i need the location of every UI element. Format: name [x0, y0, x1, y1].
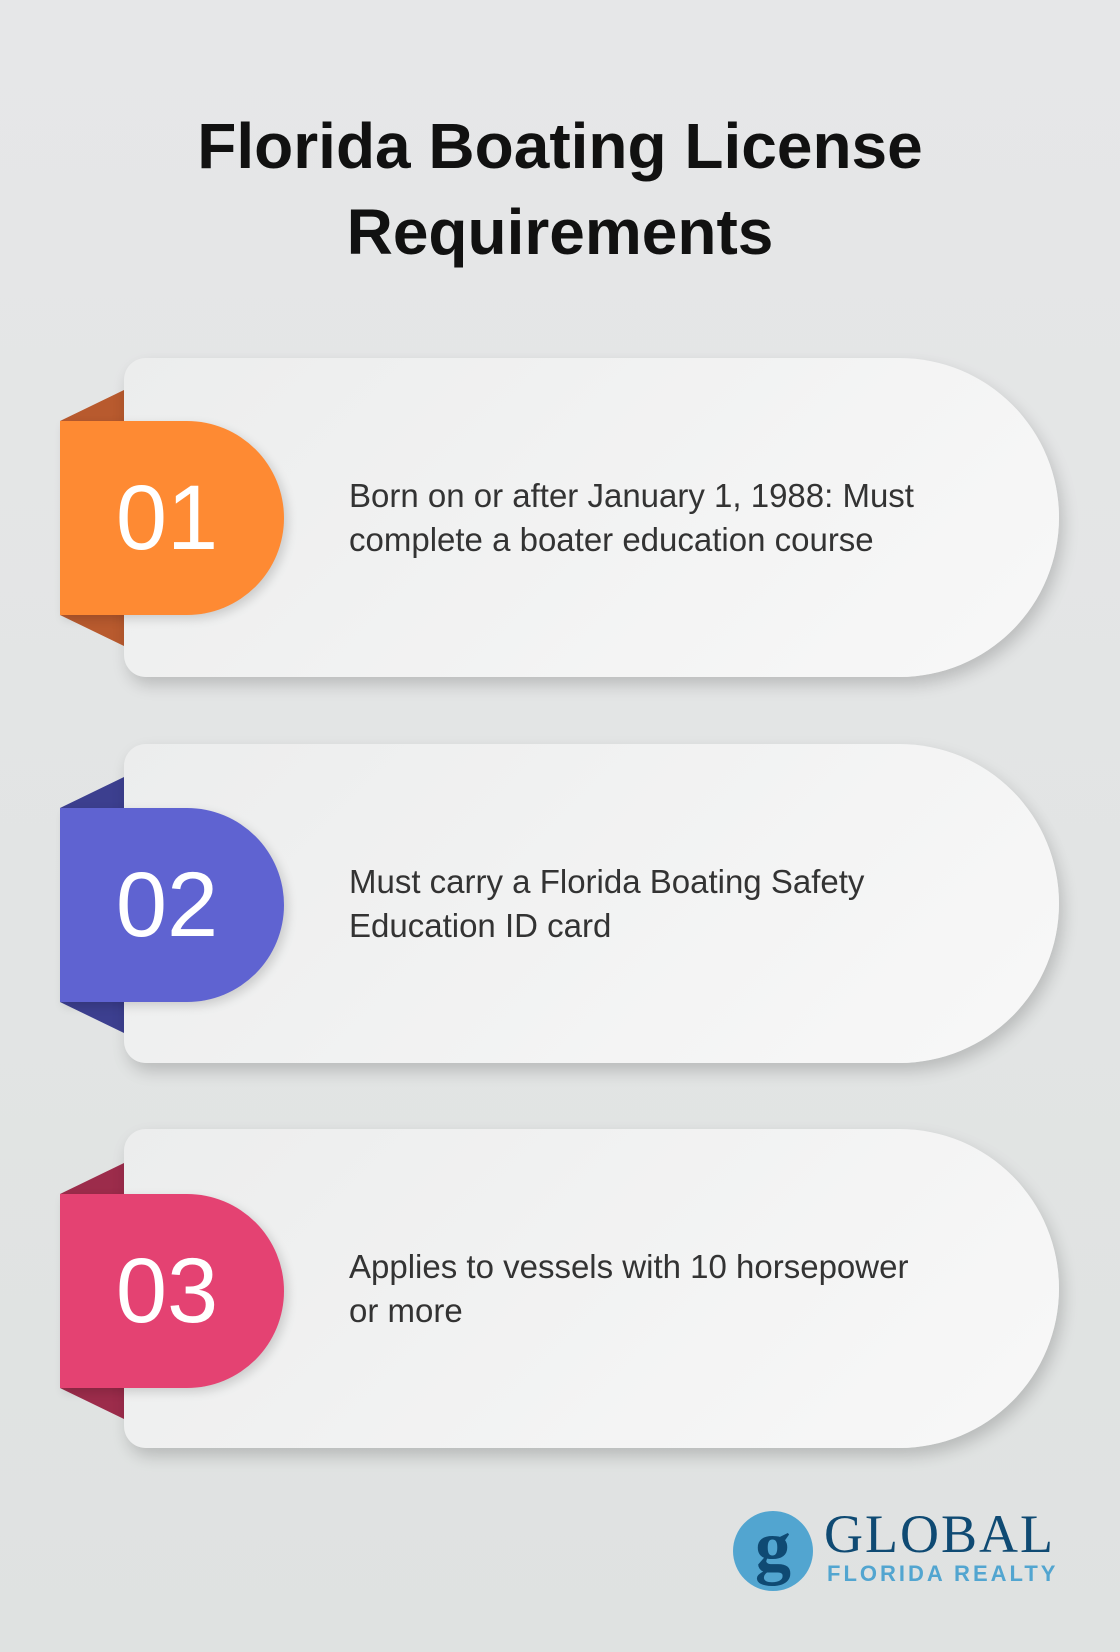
panel: item 3: [60, 1129, 1069, 1462]
text 1: complete a boater education course: [349, 521, 874, 558]
card 1: [124, 358, 1059, 677]
badge 02: 02: [116, 854, 218, 956]
card 3: [124, 1129, 1059, 1448]
logo text: GLOBAL: [824, 1504, 1055, 1564]
card 2: [124, 744, 1059, 1063]
logo: FLORIDA REALTY: [827, 1561, 1058, 1586]
text 2: [349, 863, 864, 944]
panel: item 2: [60, 744, 1070, 1078]
badge 03: [60, 1194, 284, 1388]
badge 02: [60, 808, 284, 1002]
panel: item 1: [60, 358, 1070, 692]
badge 03: 03: [116, 1240, 218, 1342]
badge 01: 01: [116, 466, 218, 568]
icon: g circle: [733, 1510, 813, 1591]
badge 01: [60, 421, 284, 615]
text 3: or more: [349, 1292, 463, 1329]
text 1: [349, 477, 914, 558]
text 1: Born on or after January 1, 1988: Must: [349, 477, 914, 514]
triangles 1: [60, 390, 124, 646]
text 2: Education ID card: [349, 907, 611, 944]
text 2: Must carry a Florida Boating Safety: [349, 863, 864, 900]
text 3: [349, 1248, 908, 1329]
title: Florida Boating License: [197, 110, 923, 182]
triangles 2: [60, 777, 124, 1033]
title: Requirements: [347, 196, 773, 268]
logo: [733, 1504, 1058, 1591]
text 3: Applies to vessels with 10 horsepower: [349, 1248, 908, 1285]
title: [197, 110, 923, 268]
triangles 3: [60, 1163, 124, 1419]
